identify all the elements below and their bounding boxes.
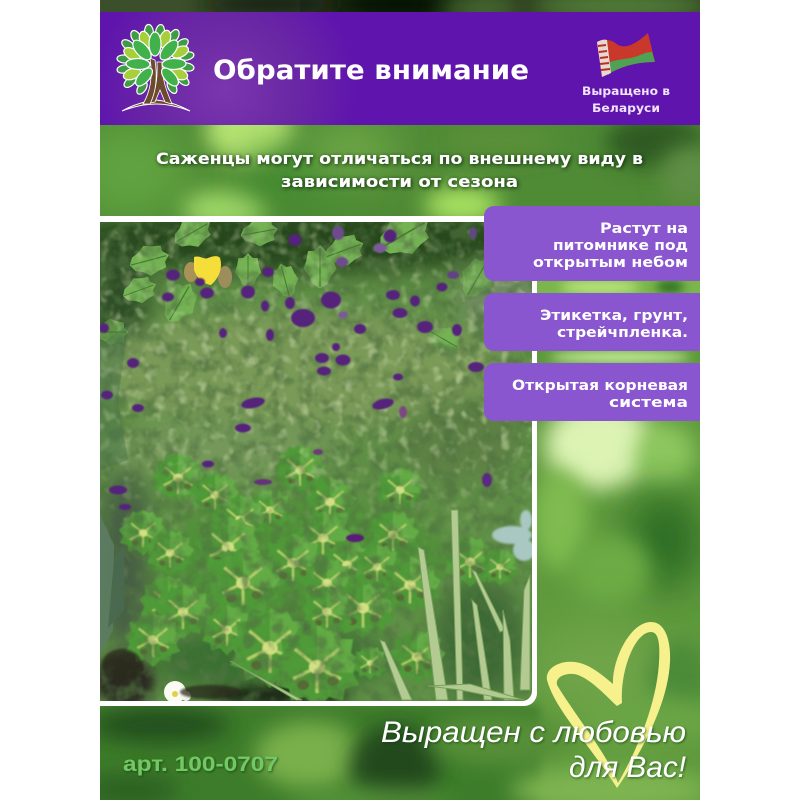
subtitle bbox=[156, 149, 643, 191]
slogan: Выращен с любовью bbox=[381, 716, 686, 749]
subtitle: зависимости от сезона bbox=[281, 172, 518, 191]
tree trunk and ground bbox=[122, 58, 190, 111]
photo frame bbox=[100, 216, 537, 706]
background colour masses bbox=[60, 206, 540, 708]
pill: open-air growing: Растут на bbox=[600, 221, 688, 237]
label: grown in Belarus bbox=[583, 86, 670, 114]
pill: open-air growing: питомнике под bbox=[553, 238, 688, 254]
subtitle: Саженцы могут отличаться по внешнему виду в bbox=[156, 149, 643, 168]
slogan: для Вас! bbox=[569, 751, 687, 784]
icon: flag of Belarus bbox=[597, 33, 655, 77]
photo: geranium bush bbox=[100, 222, 532, 701]
top background strip bbox=[100, 0, 700, 12]
purple geranium flowers bbox=[99, 226, 492, 542]
infographic page bbox=[100, 0, 700, 800]
yellow tulip bbox=[184, 256, 232, 288]
pale variegated blades bbox=[230, 510, 530, 700]
pill: packaging bbox=[484, 293, 700, 351]
title: Обратите внимание bbox=[213, 55, 529, 86]
pill: open root system: система bbox=[609, 395, 688, 411]
soil patch shading bbox=[102, 649, 240, 699]
top leaves bbox=[100, 222, 492, 354]
pill: open root system: Открытая корневая bbox=[512, 378, 688, 394]
icon: pale spruce branch bbox=[492, 510, 535, 561]
tree leaves bbox=[116, 24, 195, 96]
lower geranium leaves bbox=[119, 445, 520, 709]
logo: tree bbox=[116, 24, 195, 111]
bottom background bbox=[80, 706, 540, 800]
pill: packaging: стрейчпленка. bbox=[557, 325, 688, 341]
iris blades at left bbox=[100, 324, 128, 655]
green background panels bbox=[100, 125, 700, 800]
white flower bbox=[164, 681, 191, 703]
header band bbox=[100, 12, 700, 125]
pill: open-air growing bbox=[484, 206, 700, 281]
label: grown in Belarus: Беларуси bbox=[592, 101, 660, 115]
info pills bbox=[484, 206, 700, 421]
pill: packaging: Этикетка, грунт, bbox=[540, 308, 688, 324]
icon: yellow heart bbox=[547, 622, 670, 788]
article number: арт. 100-0707 bbox=[123, 753, 278, 776]
right column background bbox=[534, 351, 700, 800]
pill: open root system bbox=[484, 363, 700, 421]
slogan bbox=[381, 716, 687, 784]
pill: open-air growing: открытым небом bbox=[533, 255, 688, 271]
foliage texture bbox=[100, 222, 532, 701]
label: grown in Belarus: Выращено в bbox=[582, 84, 670, 98]
